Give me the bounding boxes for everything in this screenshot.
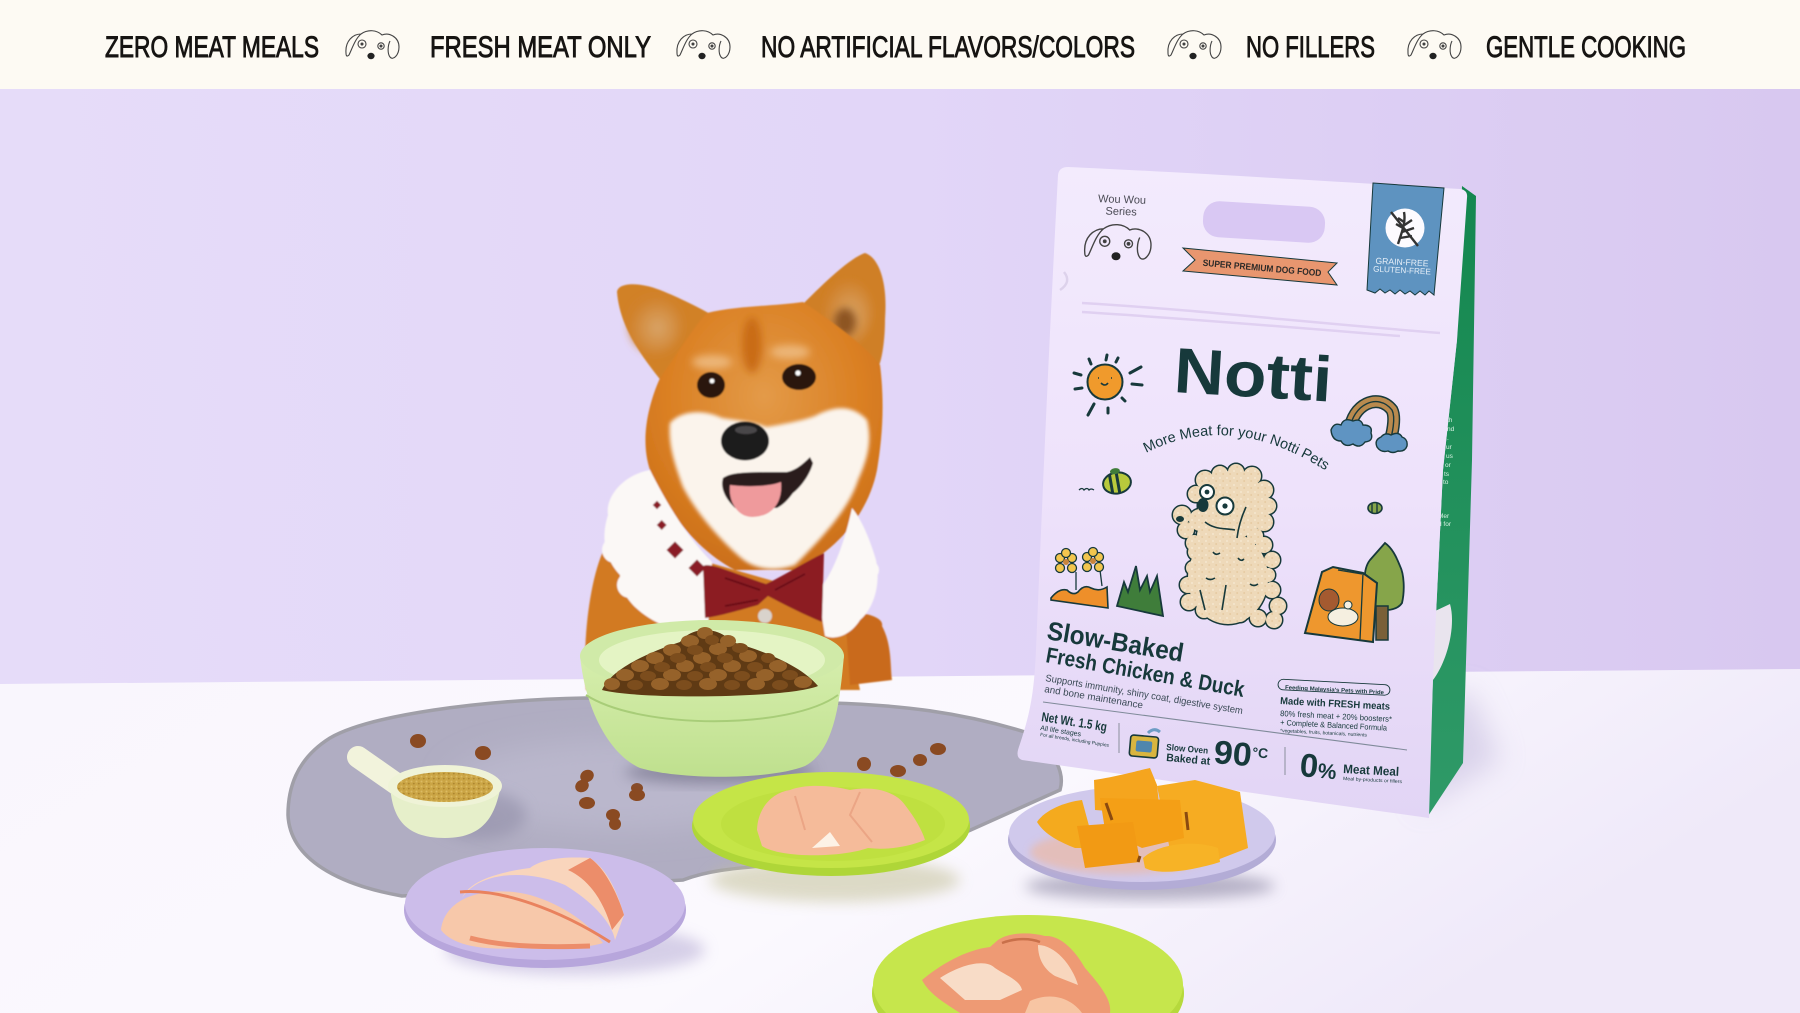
illustration: poodle: [1173, 464, 1286, 628]
mouth: [722, 457, 813, 508]
wou wou series label: Series: [1105, 205, 1137, 219]
zipper crease: [1060, 272, 1440, 336]
made with fresh meats block: *vegetables, fruits, botanicals, nutrients: [1280, 728, 1368, 739]
measuring scoop with powder: [358, 757, 526, 839]
zero percent meat meal: Meat Meal: [1343, 762, 1399, 779]
white muzzle mask: [670, 408, 869, 569]
left eye: [697, 372, 725, 398]
icon: rainbow: [1331, 402, 1407, 452]
bag front panel: [1018, 167, 1467, 818]
grey feeding mat: [288, 698, 1061, 896]
green side gusset: [1428, 186, 1476, 816]
gusset small print: ur: [1446, 444, 1453, 451]
duck slices: [922, 933, 1110, 1013]
white fluffy collar: [602, 470, 879, 637]
benefit: gentle cooking: GENTLE COOKING: [1486, 31, 1686, 64]
bag dog icon: [1085, 225, 1151, 260]
icon: oven: [1129, 730, 1160, 758]
left ear: [617, 284, 712, 382]
baked at 90 celsius: Baked at: [1166, 752, 1211, 768]
icon: dog face 2: [677, 31, 730, 59]
tagline: More Meat for your Notti Pets: [1142, 424, 1328, 470]
collar red studs: [653, 501, 705, 576]
kibble pile: [602, 627, 818, 696]
icon: dog face 1: [346, 31, 399, 59]
gusset small print: nd: [1447, 426, 1455, 433]
product bag: Notti dog food: [1018, 167, 1502, 818]
bag cast shadow: [1420, 690, 1500, 810]
gusset small print: .: [1447, 435, 1449, 442]
tongue: [730, 482, 781, 517]
divider line: [1043, 702, 1407, 750]
made with fresh meats block: Made with FRESH meats: [1280, 696, 1391, 713]
notti logo: Notti: [1172, 334, 1334, 416]
wou wou series label: [1098, 193, 1146, 219]
baked at 90 celsius: 90: [1212, 733, 1253, 773]
lime plate with chicken: [692, 772, 970, 902]
gusset small print: or: [1445, 462, 1452, 469]
green food bowl with kibble: [580, 620, 844, 784]
purple plate with pumpkin: [1008, 768, 1276, 900]
baked at 90 celsius: Slow Oven: [1166, 742, 1209, 756]
zero percent meat meal: Meal by-products or fillers: [1343, 776, 1403, 785]
loose kibble on mat: [410, 734, 946, 830]
pumpkin cubes: [1037, 768, 1248, 872]
benefit: no artificial flavors/colors: NO ARTIFICIAL FLAVORS/COLORS: [761, 31, 1135, 64]
benefit: no fillers: NO FILLERS: [1246, 31, 1375, 64]
gusset small print: d for: [1438, 521, 1452, 528]
benefit: zero meat meals: ZERO MEAT MEALS: [105, 31, 319, 64]
baked at 90 celsius: °C: [1252, 744, 1269, 761]
nose: [721, 422, 769, 460]
icon: dog face 4: [1408, 31, 1461, 59]
ribbon: super premium dog food: [1183, 248, 1337, 285]
gusset small print: to: [1443, 479, 1449, 486]
carry handle cutout: [1202, 200, 1326, 244]
grain-free tag: GRAIN-FREE: [1375, 256, 1429, 268]
gusset small print: ts: [1444, 471, 1450, 478]
net weight: All life stages: [1040, 725, 1082, 739]
zero percent meat meal: [1298, 746, 1403, 786]
dog head: [645, 302, 883, 570]
gusset small print: th: [1447, 417, 1453, 424]
made with fresh meats block: Feeding Malaysia's Pets with Pride: [1285, 685, 1384, 696]
gusset small print: us: [1446, 453, 1454, 460]
grain-free tag: GLUTEN-FREE: [1373, 264, 1432, 277]
bowl shadow: [625, 760, 815, 784]
icon: sun: [1074, 355, 1142, 415]
net weight: Net Wt. 1.5 kg: [1041, 709, 1108, 734]
gusset small print: [1438, 417, 1455, 528]
made with fresh meats block: 80% fresh meat + 20% boosters*: [1280, 709, 1392, 724]
top benefits strip: [0, 0, 1800, 90]
right eye: [782, 364, 816, 390]
grain-free tag: [1367, 183, 1444, 295]
right ear: [803, 253, 886, 368]
benefit: fresh meat only: FRESH MEAT ONLY: [430, 31, 651, 64]
net weight: [1040, 709, 1110, 749]
illustration: grass: [1117, 566, 1163, 616]
product name: slow-baked: Slow-Baked: [1045, 615, 1186, 668]
zero percent meat meal: 0%: [1298, 746, 1339, 786]
forehead shading: [692, 317, 810, 373]
gusset small print: Mer: [1438, 513, 1450, 520]
benefits copy: Supports immunity, shiny coat, digestive system: [1045, 673, 1244, 717]
benefits copy: and bone maintenance: [1044, 684, 1144, 712]
product name: fresh chicken and duck: Fresh Chicken & Duck: [1044, 642, 1247, 702]
column separators: [1119, 723, 1285, 775]
wou wou series label: Wou Wou: [1098, 193, 1146, 207]
ribbon: super premium dog food: SUPER PREMIUM DOG FOOD: [1202, 258, 1322, 278]
illustration: orange bag and tree: [1305, 543, 1404, 642]
made with fresh meats block: [1278, 679, 1392, 739]
chicken slices: [462, 857, 624, 940]
diced chicken: [757, 786, 925, 855]
lime plate with duck: [872, 915, 1184, 1013]
icon: bees: [1079, 466, 1382, 514]
white label on gusset: [1433, 604, 1452, 680]
red bow tie: [703, 553, 824, 623]
bowl body: [580, 655, 844, 777]
purple plate with sliced meat: [404, 848, 705, 975]
shiba inu dog wearing bow tie: [585, 253, 892, 690]
illustration: flowers and mound: [1051, 548, 1108, 608]
dog tail fur: [845, 612, 892, 685]
baked at 90 celsius: [1166, 733, 1269, 773]
white table surface: [0, 669, 1800, 1013]
bowl rim: [580, 620, 844, 692]
powder fill: [397, 772, 493, 802]
icon: dog face 3: [1168, 31, 1221, 59]
dog body: [585, 545, 860, 690]
net weight: For all breeds, including Puppies: [1040, 732, 1110, 749]
lavender wall background: [0, 89, 1800, 699]
made with fresh meats block: + Complete & Balanced Formula: [1280, 718, 1388, 733]
